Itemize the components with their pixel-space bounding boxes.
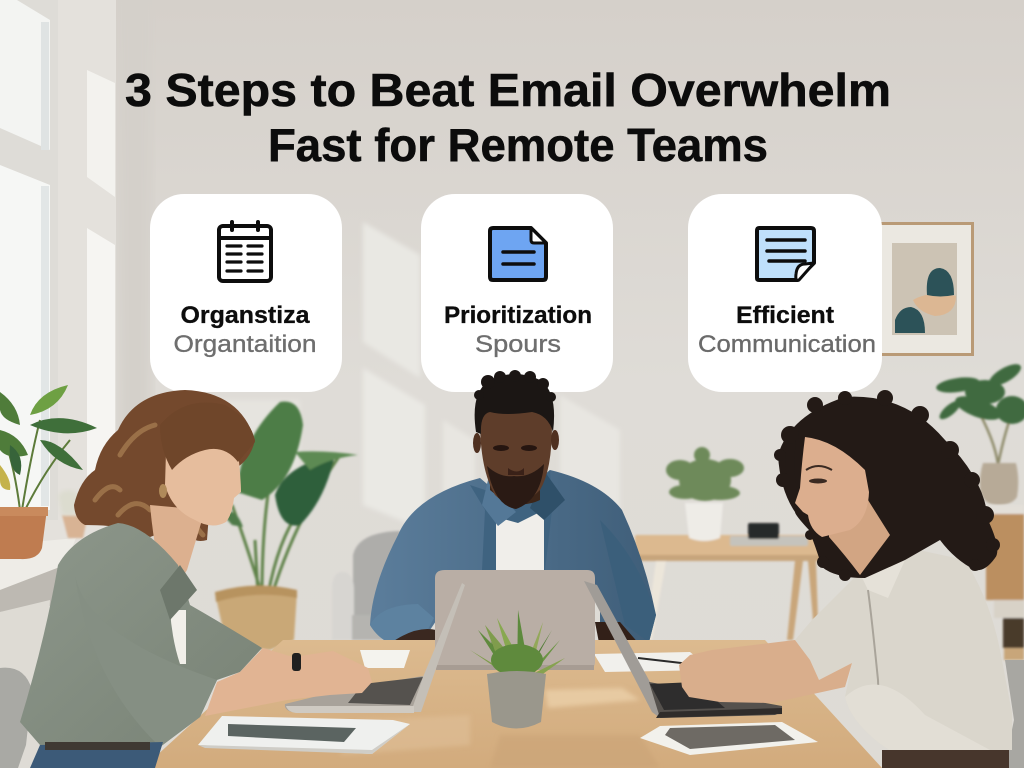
icon: note <box>757 228 814 280</box>
panel: prioritization: Prioritization <box>444 302 592 329</box>
panel: organization <box>150 194 342 392</box>
left woman: fringe <box>160 402 255 470</box>
right laptop <box>584 581 782 718</box>
title: 3 Steps to Beat Email Overwhelm <box>125 64 891 116</box>
panel: efficient communication: Efficient <box>736 302 834 329</box>
right woman: belt <box>882 750 1009 768</box>
table sunlight and grain <box>340 688 660 768</box>
wood cabinet <box>985 505 1024 660</box>
sunlight patches on wall <box>200 222 620 530</box>
notepads on table <box>360 650 712 672</box>
left woman: shirt <box>20 523 262 750</box>
title <box>125 64 891 171</box>
back chairs <box>0 660 1024 768</box>
right woman <box>679 390 1012 768</box>
window <box>0 0 116 560</box>
panel: efficient communication: Communication <box>698 331 876 358</box>
title: Fast for Remote Teams <box>268 119 768 171</box>
right woman: neck <box>829 500 890 575</box>
panel: efficient communication <box>688 194 882 392</box>
panel: organization: Organstiza <box>180 302 310 329</box>
right woman: face <box>795 437 869 537</box>
left woman: hair back <box>74 390 255 541</box>
framed art on wall <box>860 222 974 356</box>
panel: organization: Organtaition <box>174 331 316 358</box>
potted plant on window sill <box>0 385 97 559</box>
right woman: shirt <box>795 547 1012 750</box>
potted plant on table <box>470 610 565 728</box>
left laptop <box>285 583 465 713</box>
man: hair <box>474 370 556 434</box>
man: forearms <box>388 629 440 652</box>
left woman: neck <box>150 505 205 600</box>
icon: calendar <box>219 222 271 281</box>
right woman: hair mass <box>774 390 1000 581</box>
panel: prioritization <box>421 194 613 392</box>
plant on right cabinet <box>935 360 1024 505</box>
left woman: arms and hand <box>205 648 372 716</box>
panel: prioritization: Spours <box>475 331 561 358</box>
right woman: arms and hands <box>679 640 852 703</box>
plant and basket, left of centre <box>215 401 358 650</box>
icon: document <box>490 228 546 280</box>
tablets on table <box>198 716 818 755</box>
left woman: jeans <box>30 742 163 768</box>
right woman: front curls <box>785 440 798 490</box>
desk with plant and items <box>635 447 835 640</box>
left woman: hair highlights <box>95 425 203 535</box>
table <box>143 640 882 768</box>
left woman: face <box>165 441 241 526</box>
left woman <box>20 390 372 768</box>
man: torso and shirt <box>370 470 656 646</box>
back laptop <box>435 570 595 670</box>
window sill and radiator <box>0 538 76 680</box>
man in denim shirt <box>370 370 656 652</box>
man: neck and head <box>490 470 540 504</box>
grey armchair behind man <box>332 531 400 640</box>
